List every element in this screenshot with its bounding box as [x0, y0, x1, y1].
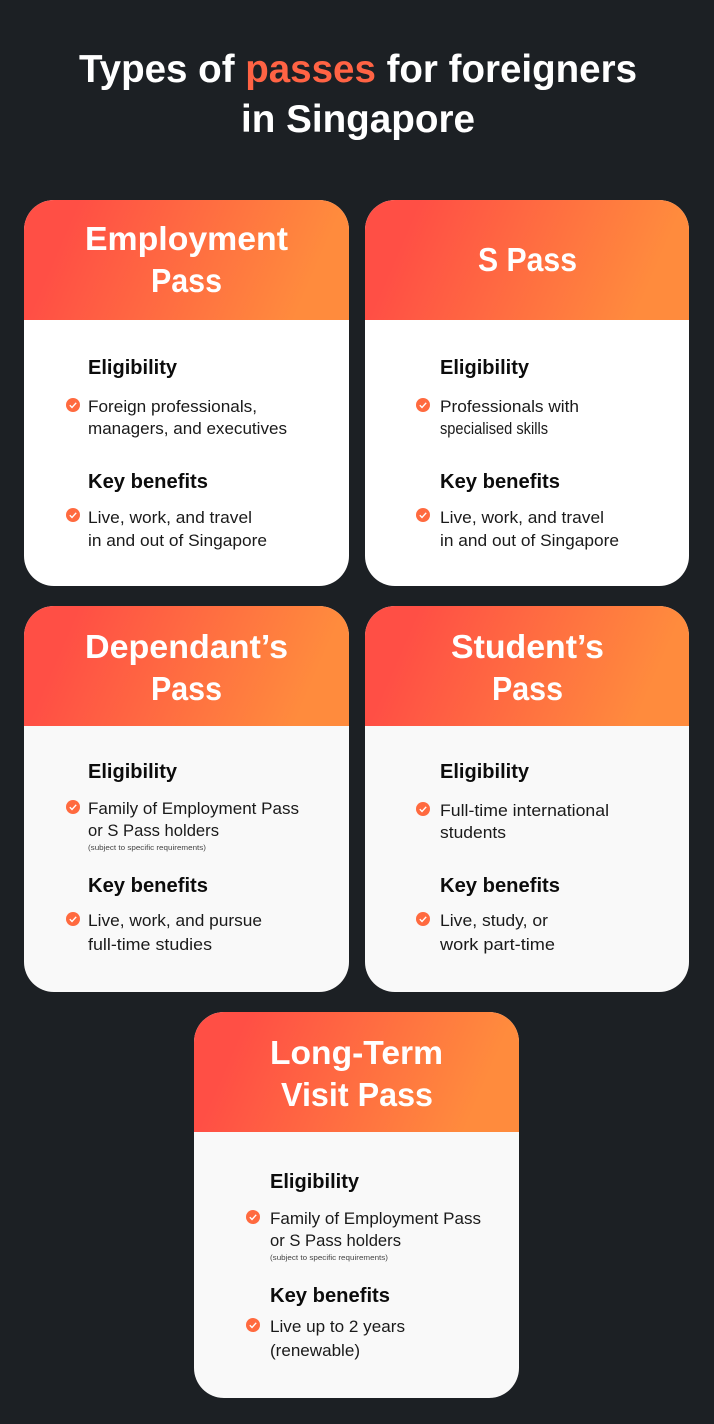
heading: Dependant's Pass: Dependant’s	[85, 628, 288, 665]
icon: check	[66, 912, 80, 926]
benefits text: Live, work, and travel	[440, 509, 604, 527]
key benefits heading: Key benefits	[440, 471, 560, 493]
eligibility heading: Eligibility	[440, 357, 530, 379]
heading: Long-Term Visit Pass: Visit Pass	[281, 1076, 433, 1113]
heading: Employment Pass: Employment	[85, 220, 288, 257]
eligibility text: students	[440, 824, 506, 842]
eligibility text	[88, 800, 299, 840]
benefits text: full-time studies	[88, 936, 212, 954]
eligibility heading: Eligibility	[270, 1171, 360, 1193]
eligibility heading: Eligibility	[440, 761, 530, 783]
benefits text	[439, 912, 555, 954]
title: Types of passes for foreigners	[79, 48, 637, 91]
footnote: (subject to specific requirements)	[270, 1255, 388, 1262]
panel: Dependant's Pass	[24, 606, 349, 992]
key benefits heading: Key benefits	[270, 1285, 390, 1307]
benefits text: Live, work, and travel	[88, 509, 252, 527]
eligibility text: or S Pass holders	[88, 822, 219, 840]
benefits text: in and out of Singapore	[440, 532, 619, 550]
heading: Student's Pass	[451, 628, 604, 707]
benefits text	[270, 1318, 405, 1360]
key benefits heading: Key benefits	[88, 471, 208, 493]
eligibility text	[88, 398, 287, 438]
eligibility text	[270, 1210, 481, 1250]
icon: check	[66, 800, 80, 814]
eligibility text	[440, 398, 579, 438]
icon: check	[416, 398, 430, 412]
panel: Student's Pass	[365, 606, 689, 992]
eligibility text: managers, and executives	[88, 420, 287, 438]
benefits text: work part-time	[439, 936, 555, 954]
benefits text	[440, 509, 619, 550]
eligibility text: or S Pass holders	[270, 1232, 401, 1250]
title	[79, 48, 637, 141]
eligibility text: Family of Employment Pass	[88, 800, 299, 818]
heading: Dependant's Pass: Pass	[151, 670, 222, 707]
benefits text: Live up to 2 years	[270, 1318, 405, 1336]
heading: Dependant's Pass	[85, 628, 288, 707]
heading: Long-Term Visit Pass	[270, 1034, 443, 1113]
icon: check	[416, 508, 430, 522]
key benefits heading: Key benefits	[88, 875, 208, 897]
eligibility text: Full-time international	[440, 802, 609, 820]
title: in Singapore	[241, 98, 475, 141]
eligibility text: specialised skills	[440, 420, 548, 438]
footnote: (subject to specific requirements)	[88, 845, 206, 852]
icon: check	[416, 802, 430, 816]
eligibility heading: Eligibility	[88, 357, 178, 379]
heading: Student's Pass: Student’s	[451, 628, 604, 665]
heading: S Pass: S Pass	[478, 241, 577, 278]
icon: check	[66, 398, 80, 412]
eligibility text: Family of Employment Pass	[270, 1210, 481, 1228]
eligibility heading: Eligibility	[88, 761, 178, 783]
heading: Student's Pass: Pass	[492, 670, 563, 707]
benefits text: in and out of Singapore	[88, 532, 267, 550]
benefits text: Live, study, or	[440, 912, 549, 930]
heading: Employment Pass	[85, 220, 288, 299]
panel: Long-Term Visit Pass	[194, 1012, 519, 1398]
panel: Employment Pass	[24, 200, 349, 586]
benefits text	[88, 912, 262, 954]
eligibility text: Foreign professionals,	[88, 398, 257, 416]
key benefits heading: Key benefits	[440, 875, 560, 897]
benefits text: (renewable)	[270, 1342, 360, 1360]
eligibility text	[440, 802, 609, 842]
icon: check	[66, 508, 80, 522]
panel: S Pass	[365, 200, 689, 586]
icon: check	[246, 1318, 260, 1332]
heading: Employment Pass: Pass	[151, 262, 222, 299]
heading: Long-Term Visit Pass: Long-Term	[270, 1034, 443, 1071]
benefits text: Live, work, and pursue	[88, 912, 262, 930]
benefits text	[88, 509, 267, 550]
icon: check	[246, 1210, 260, 1224]
eligibility text: Professionals with	[440, 398, 579, 416]
icon: check	[416, 912, 430, 926]
